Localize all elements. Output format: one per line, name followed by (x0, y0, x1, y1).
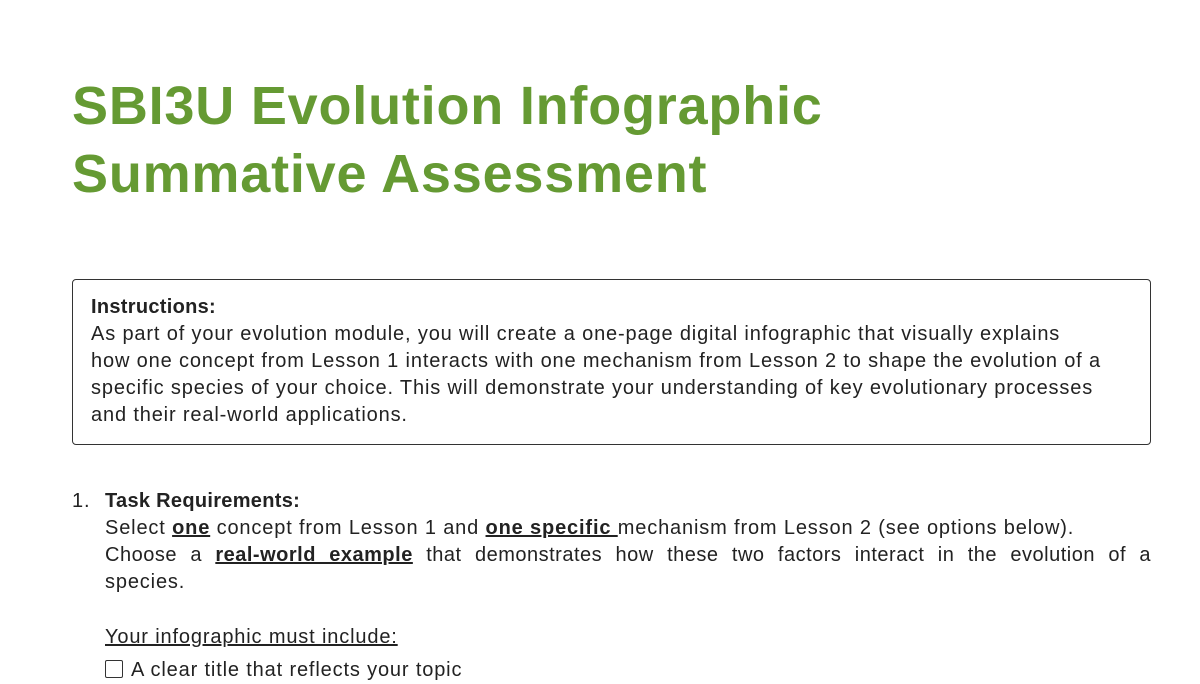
task text: Select one concept from Lesson 1 and one specific mechanism from Lesson 2 (see options below). (105, 517, 1074, 539)
must include heading: Your infographic must include: (105, 626, 398, 648)
task requirements: Choose a real-world example that demonstrates how these two factors interact in the evolution of a (105, 544, 1151, 566)
instructions heading: Instructions: (91, 296, 216, 318)
checklist item: A clear title that reflects your topic (131, 659, 462, 681)
task requirements (72, 490, 1151, 681)
task requirements: species. (105, 571, 185, 593)
instructions box (72, 279, 1151, 445)
title: Summative Assessment (72, 144, 707, 204)
task heading: Task Requirements: (105, 490, 300, 512)
instructions text: specific species of your choice. This will demonstrate your understanding of key evolutionary processes (91, 377, 1093, 399)
instructions text: how one concept from Lesson 1 interacts with one mechanism from Lesson 2 to shape the evolution of a (91, 350, 1101, 372)
task requirements: 1. (72, 490, 90, 512)
title (72, 76, 823, 204)
instructions text (91, 323, 1101, 426)
title: SBI3U Evolution Infographic (72, 76, 823, 136)
instructions text: and their real-world applications. (91, 404, 408, 426)
instructions text: As part of your evolution module, you will create a one-page digital infographic that visually explains (91, 323, 1060, 345)
